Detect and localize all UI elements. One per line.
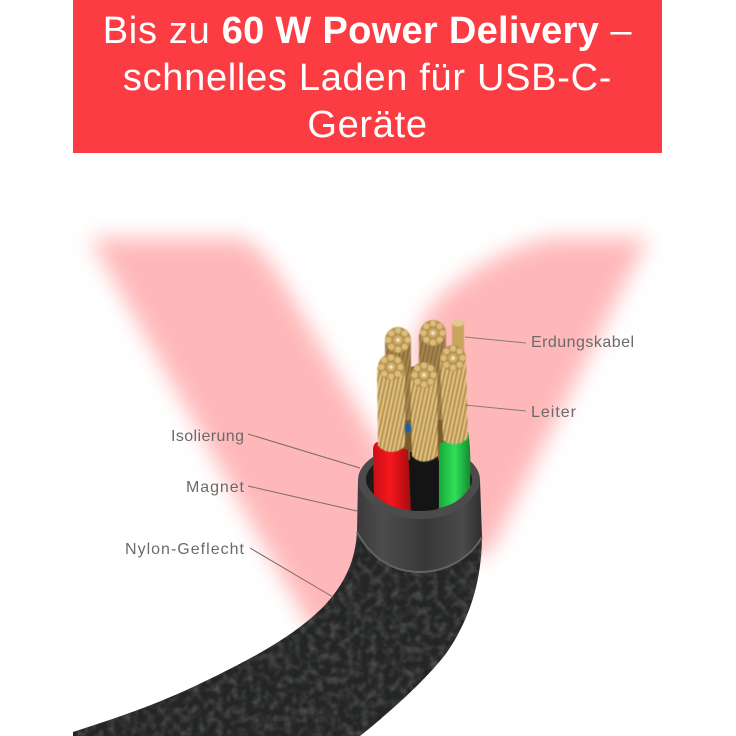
black insulated wire xyxy=(410,452,438,514)
title banner xyxy=(73,0,662,153)
label: Magnet: Magnet xyxy=(186,479,245,496)
back copper strands xyxy=(385,320,466,460)
title banner: schnelles Laden für USB-C- xyxy=(123,57,612,99)
label: Erdungskabel: Erdungskabel xyxy=(531,334,634,351)
label: Leiter xyxy=(465,404,577,421)
collar front rim xyxy=(362,484,476,515)
label: Isolierung: Isolierung xyxy=(171,428,244,445)
label: Nylon-Geflecht: Nylon-Geflecht xyxy=(125,541,245,558)
green insulated wire xyxy=(439,432,470,508)
red insulated wire xyxy=(373,442,411,510)
label: Isolierung xyxy=(171,428,360,468)
title banner: Bis zu 60 W Power Delivery – xyxy=(103,10,632,52)
title banner: Geräte xyxy=(307,104,428,146)
front copper strands xyxy=(377,345,468,462)
label: Erdungskabel xyxy=(465,334,634,351)
label: Nylon-Geflecht xyxy=(125,541,333,597)
pink V glow xyxy=(90,238,648,650)
metal collar xyxy=(357,445,482,572)
braided nylon cable body xyxy=(73,520,493,736)
label: Magnet xyxy=(186,479,357,511)
cable illustration with labels xyxy=(73,226,654,736)
label: Leiter: Leiter xyxy=(531,404,577,421)
